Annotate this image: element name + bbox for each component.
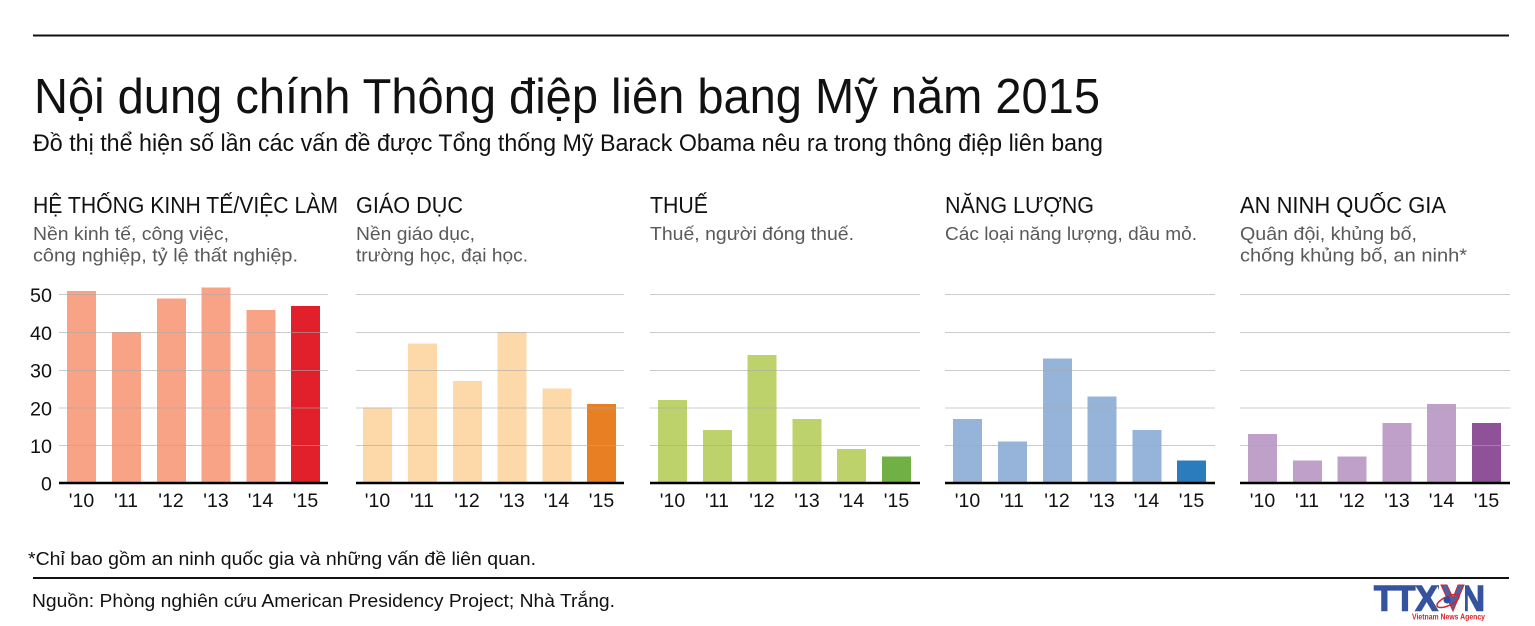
source: Nguồn: Phòng nghiên cứu American Presidency Project; Nhà Trắng. [32,590,615,611]
bar chart: education: '11 [410,490,434,512]
heading: taxes: THUẾ [650,191,708,218]
bar chart: energy: '12 [1044,490,1070,512]
bar chart: taxes: '13 [794,490,820,512]
bar chart: education: '12 [454,490,480,512]
panel: energy [945,192,1215,512]
bar chart: national security: '13 [1384,490,1410,512]
bar chart: taxes: '10 [660,490,685,512]
description: education: trường học, đại học. [356,244,528,266]
logo: TTXVN: Vietnam News Agency [1412,612,1485,622]
logo: TTXVN: TTXVN [1374,580,1485,618]
bar chart: economy and jobs [59,288,328,512]
description: economy and jobs [33,223,298,266]
panel: education [356,192,624,512]
bar chart: education: '14 [544,490,569,512]
bar chart: energy: '13 [1089,490,1115,512]
y axis labels: 40 [30,323,52,345]
bar chart: energy: '10 [955,490,980,512]
description: energy: Các loại năng lượng, dầu mỏ. [945,223,1197,244]
bar chart: national security: '10 [1250,490,1275,512]
bar chart: energy: '15 [1179,490,1204,512]
bar chart: education: '10 [365,490,390,512]
bar chart: economy and jobs: '14 [248,490,273,512]
bar chart: economy and jobs: '15 [293,490,318,512]
bar chart: taxes: '11 [705,490,729,512]
bar chart: national security: '12 [1339,490,1365,512]
y axis labels: 30 [30,360,52,382]
bar chart: taxes [650,294,920,512]
description: national security: Quân đội, khủng bố, [1240,223,1417,244]
bar chart: taxes: '14 [839,490,864,512]
heading: economy and jobs: HỆ THỐNG KINH TẾ/VIỆC LÀM [33,191,338,218]
footnote: *Chỉ bao gồm an ninh quốc gia và những vấn đề liên quan. [28,548,536,569]
description: economy and jobs: Nền kinh tế, công việc, [33,223,229,244]
bar chart: economy and jobs: '12 [158,490,184,512]
y axis labels [30,285,52,496]
bar chart: national security: '15 [1474,490,1499,512]
description: education: Nền giáo dục, [356,223,475,244]
bar chart: economy and jobs: '11 [114,490,138,512]
heading: energy: NĂNG LƯỢNG [945,192,1094,218]
bar chart: taxes: '12 [749,490,775,512]
bar chart: energy: '14 [1134,490,1159,512]
bar chart: national security: '11 [1295,490,1319,512]
y axis labels: 20 [30,398,52,420]
bar chart: national security: '14 [1429,490,1454,512]
bar chart: taxes: '15 [884,490,909,512]
bar chart: economy and jobs: '13 [203,490,229,512]
y axis labels: 50 [30,285,52,307]
panel: economy and jobs [30,191,338,512]
description: economy and jobs: công nghiệp, tỷ lệ thất nghiệp. [33,244,298,266]
description: national security: chống khủng bố, an ninh* [1240,244,1467,266]
description: national security [1240,223,1467,266]
panel: national security [1240,191,1510,512]
y axis labels: 0 [41,474,52,496]
panel: taxes [650,191,920,512]
description: taxes: Thuế, người đóng thuế. [650,223,854,244]
bar chart: education [356,294,624,512]
bar chart: economy and jobs: '10 [69,490,94,512]
bar chart: energy: '11 [1000,490,1024,512]
title: Nội dung chính Thông điệp liên bang Mỹ năm 2015 [34,70,1100,124]
bar chart: education: '15 [589,490,614,512]
y axis labels: 10 [30,436,52,458]
heading: education: GIÁO DỤC [356,192,463,218]
description: education [356,223,528,266]
subtitle: Đồ thị thể hiện số lần các vấn đề được Tổng thống Mỹ Barack Obama nêu ra trong thông điệp liên bang [33,130,1103,157]
bar chart: energy [945,294,1215,512]
heading: national security: AN NINH QUỐC GIA [1240,191,1447,218]
bar chart: national security [1240,294,1510,512]
bar chart: education: '13 [499,490,525,512]
